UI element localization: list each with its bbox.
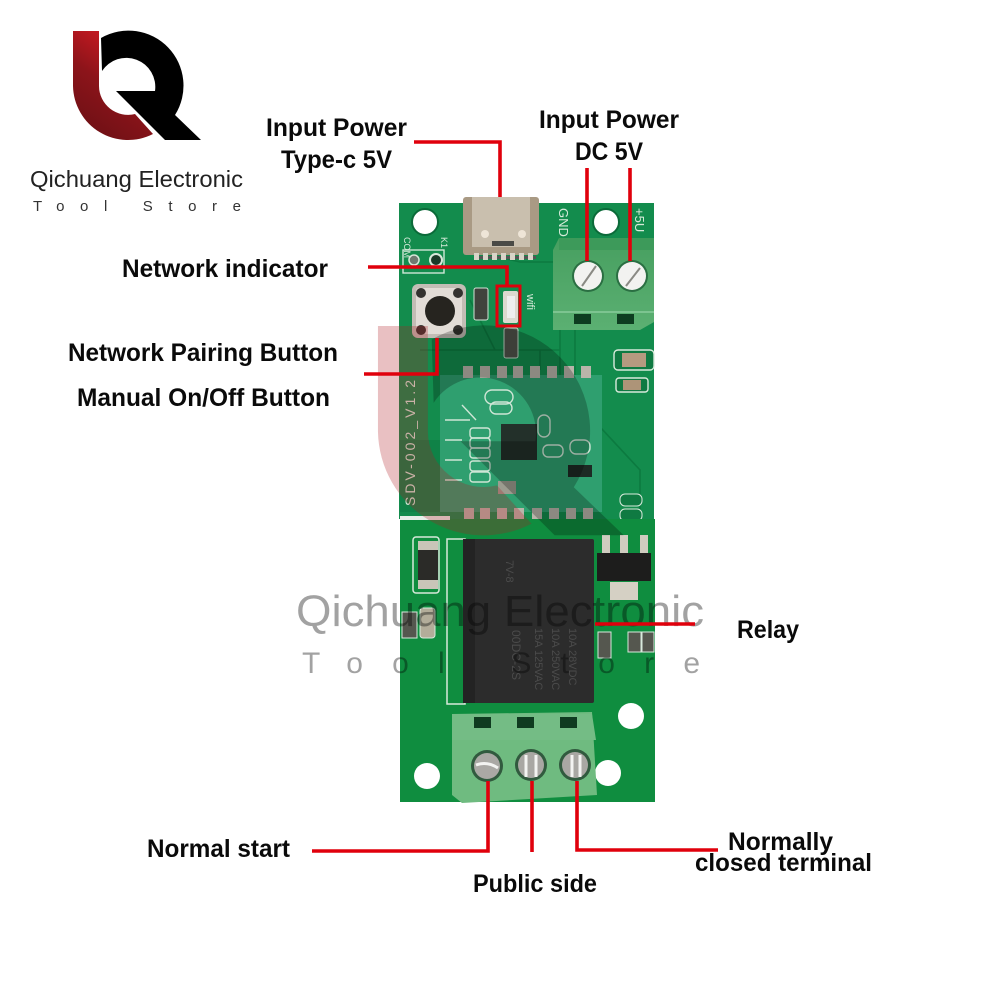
silkscreen labels: +5U xyxy=(632,208,647,232)
callout: Network indicator: Network indicator xyxy=(122,255,328,283)
callout: Public side: Public side xyxy=(473,870,597,898)
callout: Input Power DC 5V: Input Power xyxy=(539,106,679,134)
callout: Network Pairing / Manual button: Manual On/Off Button xyxy=(77,384,330,412)
callout: Normally closed terminal: Normally xyxy=(728,828,833,856)
callout: Input Power Type-c 5V xyxy=(266,114,500,197)
logo wordmark xyxy=(30,166,243,215)
silkscreen labels: K1 xyxy=(439,237,449,248)
relay: 15A 125VAC xyxy=(532,628,544,690)
mounting holes xyxy=(412,209,619,235)
callout: Input Power Type-c 5V: Type-c 5V xyxy=(281,146,392,174)
callout: Normally closed terminal: closed terminal xyxy=(695,849,872,877)
small resistors xyxy=(402,608,654,658)
silkscreen labels xyxy=(402,208,647,506)
callout: Normally closed terminal xyxy=(577,781,872,877)
capacitors xyxy=(614,350,654,521)
logo wordmark: Tool Store xyxy=(33,198,241,215)
callout: Normal start: Normal start xyxy=(147,835,291,863)
small components near LED xyxy=(474,288,518,358)
mounting holes xyxy=(414,703,644,789)
relay: 00DC-2S xyxy=(509,630,523,680)
callout: Relay: Relay xyxy=(737,616,799,644)
screw terminal: power input xyxy=(553,238,654,330)
silkscreen labels: GND xyxy=(556,208,571,237)
callout: Input Power DC 5V: DC 5V xyxy=(575,138,643,166)
relay xyxy=(463,539,594,703)
header pads xyxy=(403,250,444,273)
relay: 10A 28VDC xyxy=(566,628,578,686)
callout: Input Power Type-c 5V: Input Power xyxy=(266,114,407,142)
silkscreen labels: COM xyxy=(402,237,412,258)
callout: Network Pairing / Manual button xyxy=(68,338,437,412)
callout: Network indicator xyxy=(122,255,520,326)
relay: 7V-8 xyxy=(503,560,515,583)
logo wordmark: Qichuang Electronic xyxy=(30,166,243,192)
USB Type-C connector xyxy=(463,197,539,260)
callout: Public side xyxy=(473,781,597,898)
logo: Qichuang brand mark xyxy=(73,31,201,140)
silkscreen labels: wifi xyxy=(524,293,536,310)
circuit board: lower section xyxy=(400,516,655,803)
callout: Network Pairing / Manual button: Network Pairing Button xyxy=(68,339,338,367)
tactile button xyxy=(412,284,466,338)
voltage regulator xyxy=(597,535,651,600)
watermark wordmark: Qichuang Electronic xyxy=(296,587,704,636)
relay: 10A 250VAC xyxy=(549,628,561,690)
callout: Normal start xyxy=(147,781,488,863)
silkscreen labels: SDV-002_V1.2 xyxy=(402,380,418,506)
diode xyxy=(413,537,439,593)
wireless module xyxy=(440,366,602,520)
circuit board: upper section xyxy=(399,197,654,521)
watermark logo xyxy=(378,325,624,535)
callout: Input Power DC 5V xyxy=(539,106,679,261)
watermark wordmark: Tool Store xyxy=(302,647,700,680)
screw terminal: output xyxy=(452,712,597,803)
watermark wordmark xyxy=(296,587,704,680)
